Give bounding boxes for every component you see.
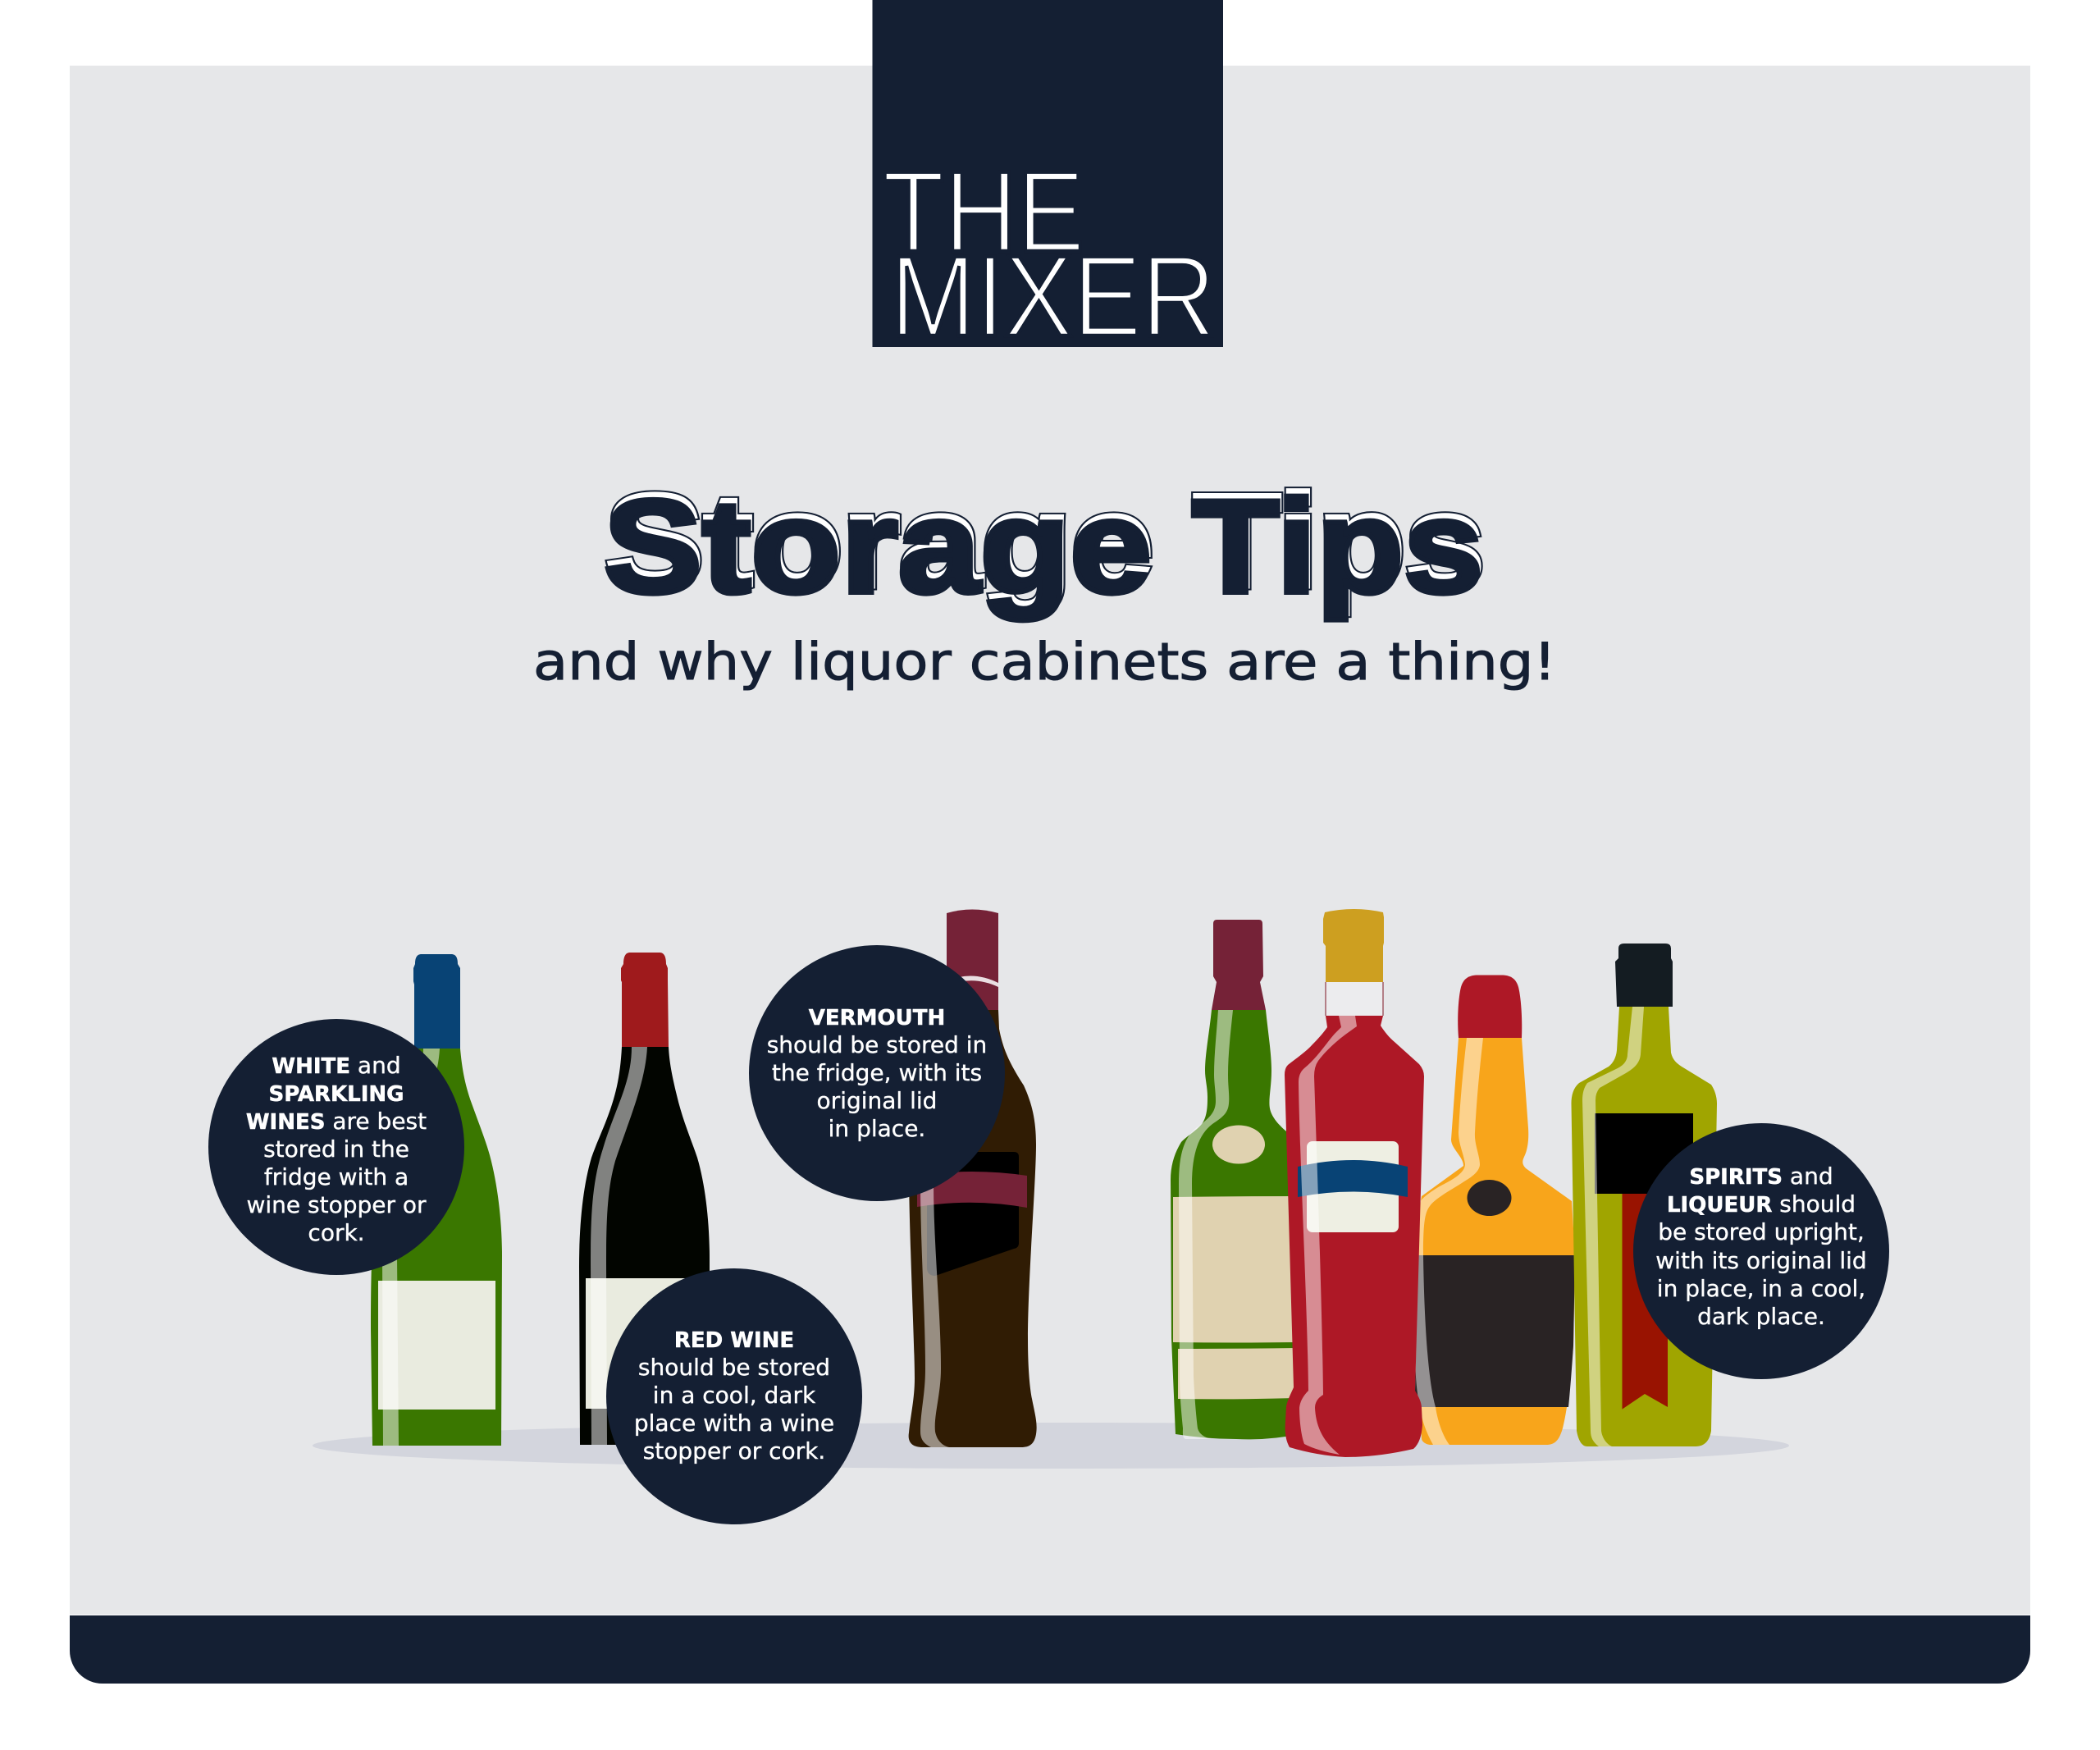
callout: spirits and liqueur: be stored upright, [1658,1218,1865,1245]
bottle: red wine [579,953,710,1445]
callout: white and sparkling wines: WINES are best [246,1108,427,1135]
logo: The Mixer: MIXER [890,231,1216,360]
callout: white and sparkling wines: SPARKLING [268,1082,404,1107]
callout: red wine [606,1268,862,1524]
callout: red wine: place with a wine [634,1410,834,1437]
callout: red wine: in a cool, dark [653,1382,816,1409]
title: Storage [604,473,1152,621]
bottle: vermouth [909,909,1037,1447]
callout: vermouth: should be stored in [767,1031,987,1058]
subtitle: and why liquor cabinets are a thing! [533,632,1556,692]
callout: vermouth: original lid [817,1087,937,1114]
footer bar [70,1615,2030,1684]
callout: red wine: stopper or cork. [643,1437,825,1464]
logo: The Mixer: THE [883,147,1084,276]
callout: vermouth: in place. [829,1115,925,1142]
callout: vermouth: the fridge, with its [772,1059,982,1086]
bottle: orange bourbon [1415,975,1575,1445]
callout: spirits and liqueur: in place, in a cool, [1657,1275,1865,1302]
title: Storage [605,467,1153,615]
title [604,467,1485,621]
title: Tips [1194,467,1485,615]
title: Storage [605,467,1153,615]
callout: white and sparkling wines: fridge with a [264,1163,409,1190]
callout: spirits and liqueur [1633,1123,1889,1379]
callout: white and sparkling wines [208,1019,464,1275]
callout: spirits and liqueur: LIQUEUR should [1667,1190,1856,1218]
callout: spirits and liqueur: with its original lid [1655,1247,1867,1274]
callout: white and sparkling wines: cork. [308,1219,365,1246]
title: Tips [1192,473,1483,621]
title: Tips [1194,467,1485,615]
callout: vermouth [749,945,1005,1201]
bottle: white wine [371,954,502,1446]
callout: red wine: should be stored [638,1354,830,1381]
callout: white and sparkling wines: wine stopper or [246,1191,427,1218]
callout: vermouth: VERMOUTH [809,1006,945,1030]
callout: spirits and liqueur: SPIRITS and [1689,1163,1833,1190]
callout: red wine: RED WINE [674,1328,794,1353]
callout: spirits and liqueur: dark place. [1697,1303,1825,1330]
logo: The Mixer [873,0,1223,360]
callout: white and sparkling wines: stored in the [263,1135,409,1163]
bottle: red aperitif [1285,909,1424,1457]
shelf shadow [313,1423,1789,1469]
callout: white and sparkling wines: WHITE and [272,1052,401,1079]
bottle: olive liqueur [1572,944,1717,1446]
bottle: green whisky [1171,920,1306,1439]
